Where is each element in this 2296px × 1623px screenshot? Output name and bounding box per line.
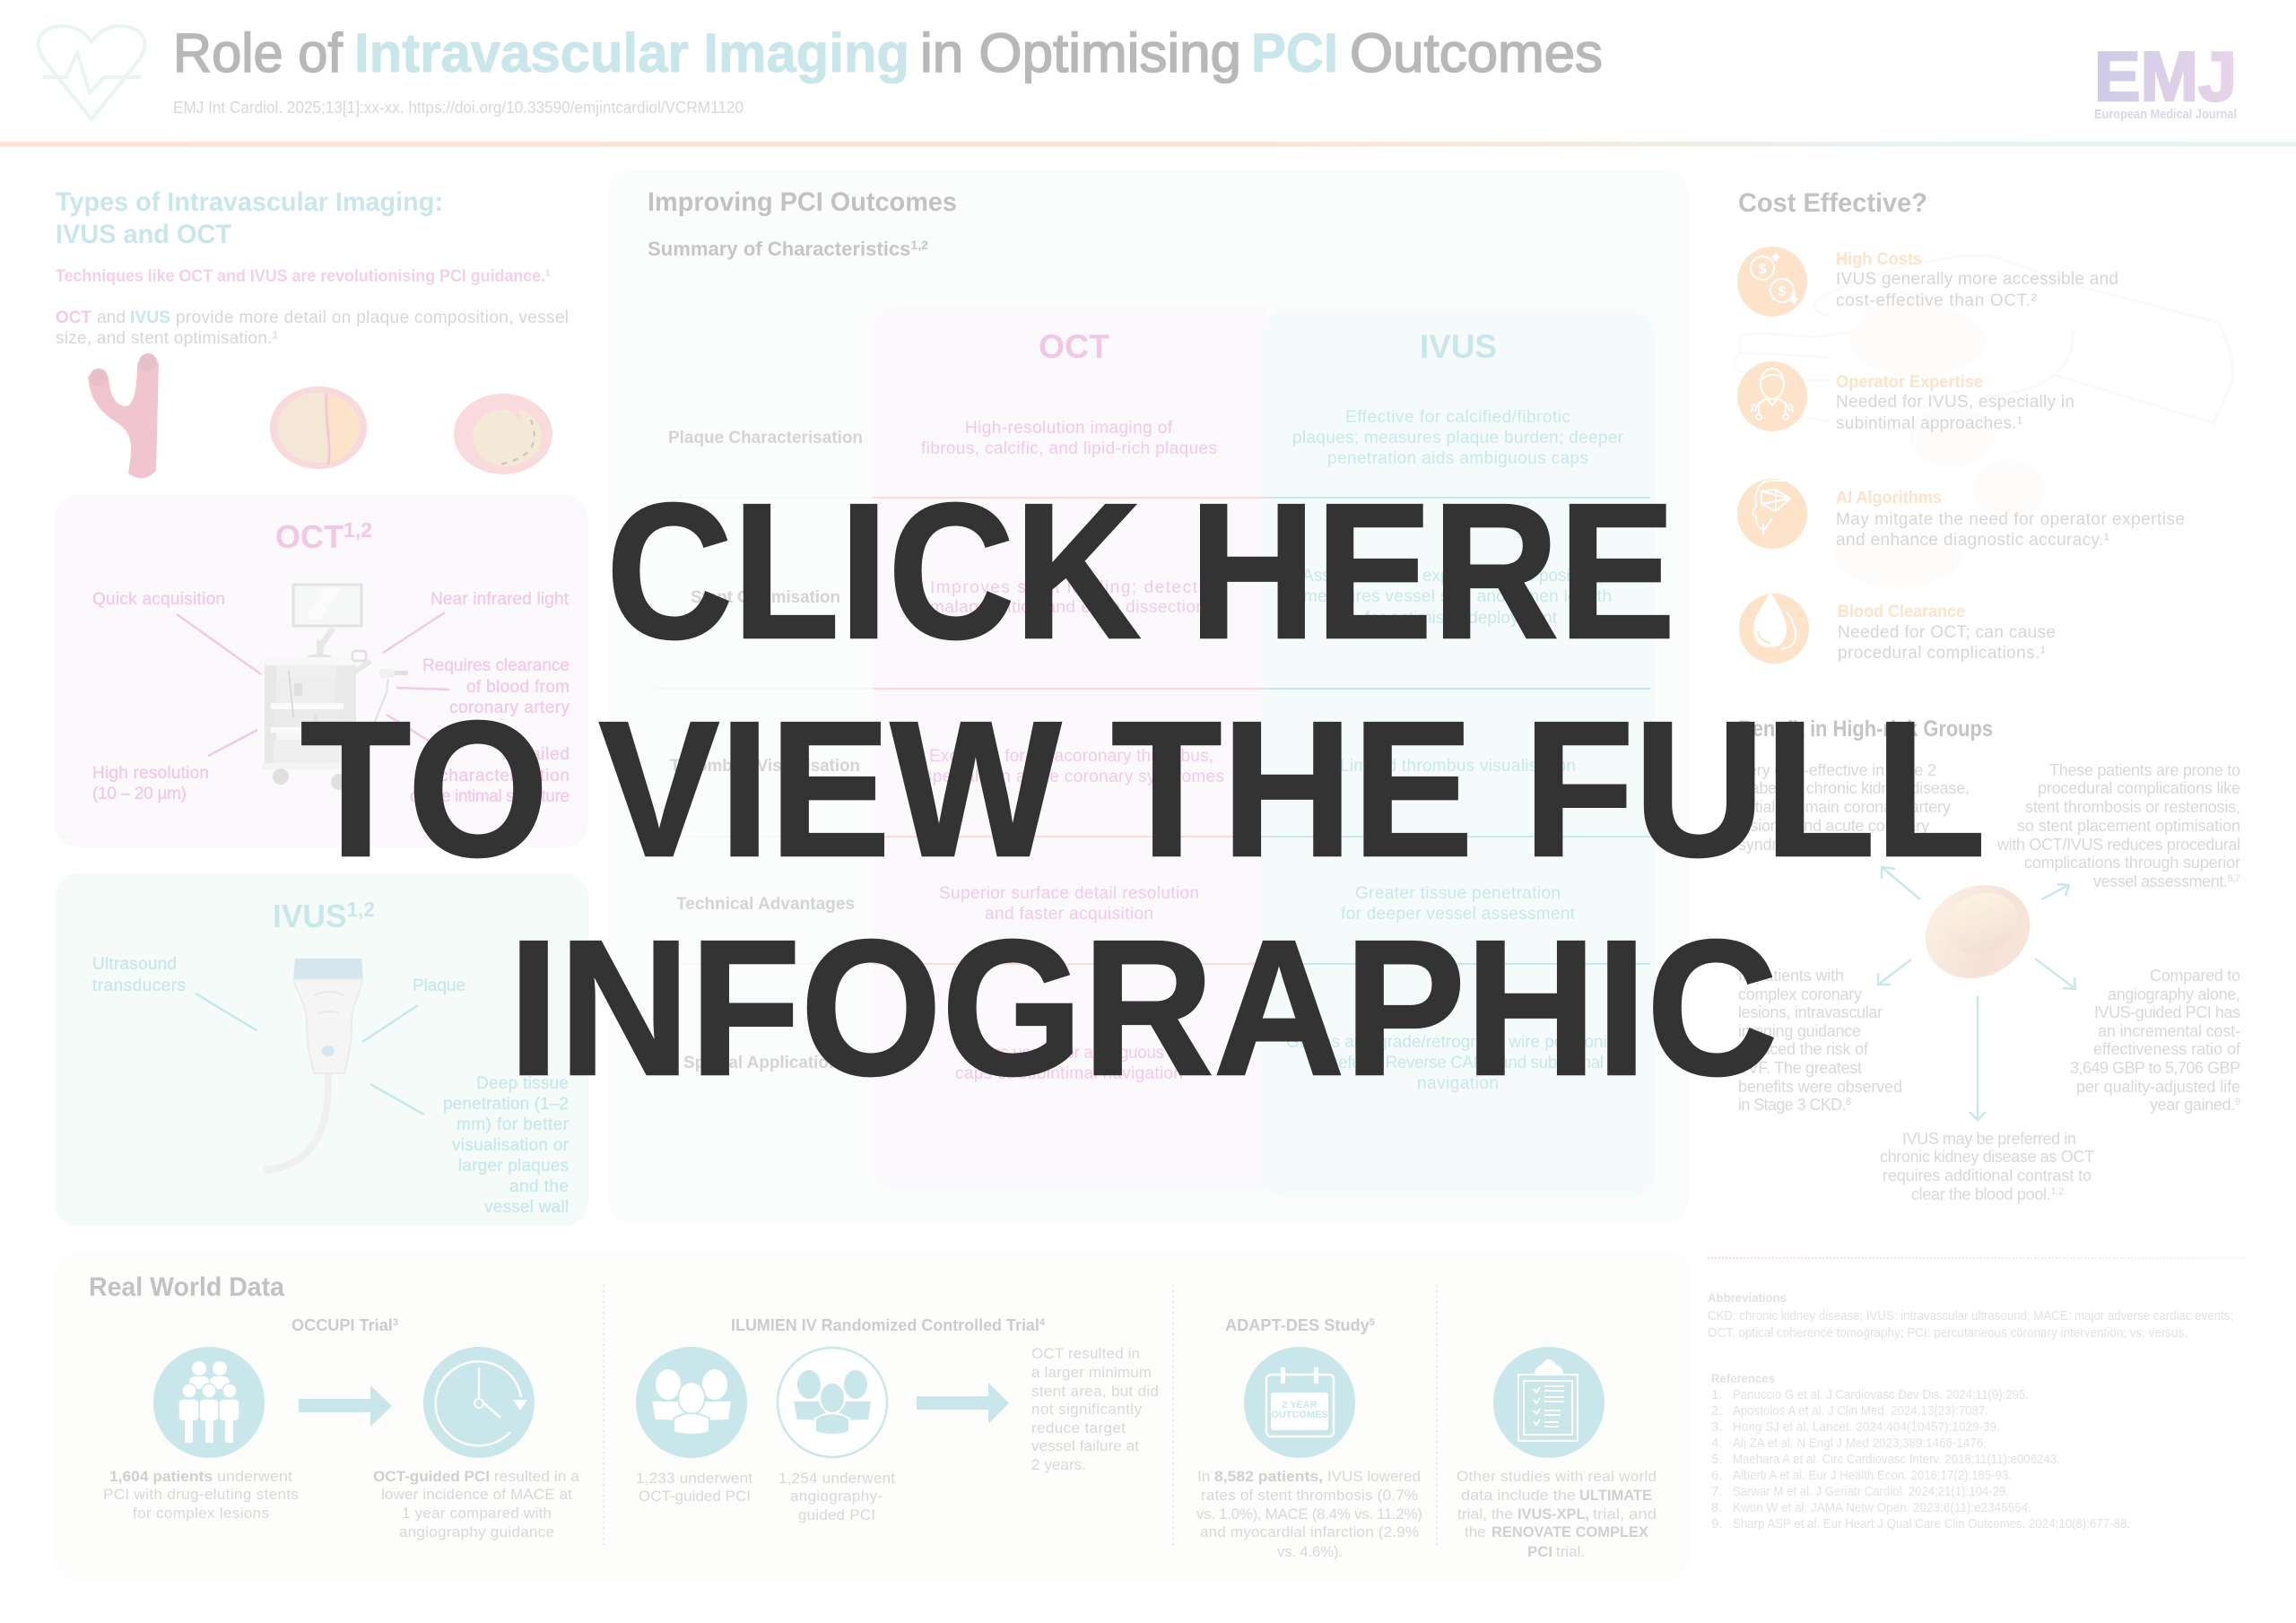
intro text: provide more detail on plaque composition, vessel [176,308,569,327]
citation: EMJ Int Cardiol. 2025;13[1]:xx-xx. https://doi.org/10.33590/emjintcardiol/VCRM1120 [173,99,744,117]
captions: other studies: PCI [1527,1543,1552,1560]
abbreviations [1708,1290,2233,1341]
references: 8. [1711,1500,1723,1515]
text: lower left: benefits were observed [1738,1078,1902,1096]
arrow [917,1383,1009,1424]
references [1711,1371,2130,1532]
captions: ADAPT-DES: rates of stent thrombosis (0.7% [1201,1487,1418,1504]
references: References [1711,1371,1775,1385]
captions: ILUMIEN IV [636,1345,1159,1523]
text: upper left: lesions, and acute coronary [1738,817,1929,835]
icon: patients crowd [153,1347,265,1458]
captions: other studies [1457,1468,1657,1560]
captions: other studies: RENOVATE COMPLEX [1492,1523,1649,1541]
subheading: summary: Summary of Characteristics [648,238,909,260]
OCT labels: High resolution [92,764,209,783]
text: upper right: procedural complications like [2038,779,2240,797]
title: Outcomes [1350,22,1603,83]
OCT labels: Requires clearance [422,656,570,675]
text: lower right: 3,649 GBP to 5,706 GBP [2070,1059,2240,1077]
icon: angiography group [778,1348,887,1457]
text: upper left [1738,761,1970,854]
OCT labels: (10 – 20 µm) [92,785,187,803]
text: lower left [1738,967,1902,1114]
references: Sharp ASP et al. Eur Heart J Qual Care Clin Outcomes. 2024;10(8):677-88. [1733,1516,2130,1532]
IVUS column text: measures vessel size and lumen length [1303,587,1612,606]
IVUS labels: visualisation or [452,1136,570,1155]
title: Intravascular Imaging [354,22,909,83]
illustration: faint hands behind cost section [1735,256,2233,587]
captions: OCCUPI: 1,604 patients [109,1468,213,1485]
row labels [668,429,863,1072]
heading: IVUS: IVUS [273,898,348,934]
text: lower right [2070,967,2241,1114]
IVUS column text: Effective for calcified/fibrotic [1345,408,1570,427]
icon: red blood cell [1909,868,2046,995]
captions: other studies: ULTIMATE [1579,1487,1652,1504]
heading: types: Types of Intravascular Imaging: [56,187,443,217]
captions: other studies: the [1465,1523,1486,1541]
captions: OCCUPI: angiography guidance [399,1523,554,1541]
captions: OCCUPI [103,1468,580,1541]
references: 3. [1711,1419,1723,1435]
title [173,22,1603,83]
trial headings: 4 [1039,1317,1046,1328]
IVUS column text: for deeper vessel assessment [1341,905,1576,924]
intro text: IVUS [130,308,170,327]
text: lower right: an incremental cost- [2098,1022,2240,1040]
logo: EMJ: EMJ [2094,37,2237,116]
text: upper right [1996,761,2240,890]
text: lower right: angiography alone, [2108,985,2240,1003]
illustration: OCT cart [262,585,408,790]
trial headings [291,1316,1375,1334]
OCT labels: Near infrared light [430,590,570,609]
icon: clock [423,1347,535,1458]
item: operator expertise [1737,361,2074,433]
row labels: Technical Advantages [676,895,855,914]
text: lower left: complex coronary [1738,985,1862,1003]
heading: types [56,187,443,249]
text: upper right: 6,7 [2228,873,2240,884]
captions: ADAPT-DES: vs. 4.6%). [1277,1543,1343,1560]
item: high costs [1737,247,2118,317]
abbreviations: Abbreviations [1708,1290,1787,1305]
captions: other studies: trial, and [1593,1506,1657,1523]
captions: OCCUPI: underwent [217,1468,292,1485]
captions: OCCUPI: PCI with drug-eluting stents [103,1486,299,1503]
captions: ILUMIEN IV: OCT resulted in [1031,1345,1140,1362]
captions: ILUMIEN IV: a larger minimum [1031,1364,1152,1381]
panel: improving PCI outcomes [608,170,1689,1223]
text: upper right: stent thrombosis or restenosis, [2025,798,2240,816]
intro text: OCT [56,308,91,327]
text: lower right: effectiveness ratio of [2093,1040,2241,1058]
text: lower left: in Stage 3 CKD. [1738,1096,1846,1114]
trial headings: OCCUPI Trial [291,1316,392,1334]
IVUS column text: Greater tissue penetration [1355,884,1561,903]
captions: other studies: trial, the [1457,1506,1513,1523]
dotted rule [1708,1257,2244,1259]
callout lines [196,994,424,1115]
captions: ILUMIEN IV: 1,254 underwent [778,1470,895,1487]
row labels: Plaque Characterisation [668,429,863,447]
IVUS labels: vessel wall [484,1198,569,1217]
icon: heart with ECG line [39,26,144,119]
text: upper left: ostial left main coronary artery [1738,798,1951,816]
text: bottom centre: IVUS may be preferred in [1902,1130,2076,1148]
IVUS column text: for optimised deployment [1365,609,1558,628]
icon: plaque cross-section 1 [270,386,367,469]
text: bottom centre: 1,2 [2050,1186,2064,1197]
OCT column text: Improves stent landing; detects [930,578,1207,597]
heading: benefit: Benefit in High-risk Groups [1738,716,1993,742]
item: operator expertise: subintimal approaches.¹ [1836,414,2022,433]
references: Apostolos A et al. J Clin Med. 2024;13(23):7087. [1733,1403,1988,1419]
OCT labels: Detailed [502,745,570,764]
icon: calendar: 2 YEAR [1282,1400,1318,1410]
trial headings: 3 [393,1317,398,1328]
trial headings: ADAPT-DES Study [1225,1316,1368,1334]
row dividers [655,498,1650,964]
captions: ILUMIEN IV: angiography- [790,1488,883,1505]
text: upper right: with OCT/IVUS reduces procedural [1996,836,2240,854]
arrow [299,1385,392,1427]
pink intro line: Techniques like OCT and IVUS are revolutionising PCI guidance.¹ [56,267,551,286]
title: Role of [173,22,344,83]
captions: ADAPT-DES: vs. 1.0%), MACE (8.4% vs. 11.2%) [1196,1506,1422,1523]
text: upper left: diabetes, chronic kidney disease, [1738,779,1970,797]
heading: types: IVUS and OCT [56,220,231,249]
text: bottom centre: clear the blood pool. [1911,1185,2051,1203]
captions: OCCUPI: resulted in a [494,1468,580,1485]
icon: calendar [1244,1347,1355,1458]
title: in Optimising [920,22,1241,83]
text: lower right: per quality-adjusted life [2076,1078,2240,1096]
OCT column text: Excellent for intracoronary thrombus, [929,747,1213,766]
overlay: click here call to action: INFOGRAPHIC [509,899,1778,1115]
captions: other studies: IVUS-XPL, [1518,1506,1589,1523]
IVUS column text: navigation [1417,1074,1499,1093]
OCT column text [914,419,1224,1083]
IVUS column text: penetration aids ambiguous caps [1327,449,1588,468]
OCT column text: fibrous, calcific, and lipid-rich plaques [921,439,1217,458]
item: high costs: $ [1759,262,1767,277]
text: lower left: 8 [1846,1097,1851,1107]
text: lower left: imaging guidance [1738,1022,1861,1040]
IVUS labels: Deep tissue [476,1074,569,1093]
icon: clipboard [1493,1347,1605,1458]
text: bottom centre: requires additional contrast to [1883,1167,2092,1185]
heading: cost effective: Cost Effective? [1738,188,1927,218]
panel: benefit in high-risk groups [1738,716,2241,1203]
icon: plaque cross-section 2 [454,394,552,474]
item: blood clearance: Needed for OCT; can cause [1838,623,2056,642]
item: AI algorithms: AI Algorithms [1836,489,1942,508]
item: AI algorithms: May mitgate the need for operator expertise [1836,510,2185,529]
heading: real world data: Real World Data [89,1272,284,1302]
captions: ADAPT-DES [1196,1468,1422,1560]
references: Maehara A et al. Circ Cardiovasc Interv. 2018;11(11):e006243. [1733,1452,2060,1467]
captions: OCCUPI: OCT-guided PCI [373,1468,490,1485]
panel: OCT device [55,495,588,847]
captions: OCCUPI: 1 year compared with [402,1505,552,1522]
references: 1. [1711,1387,1723,1402]
text: upper right: complications through superior [2024,854,2240,872]
IVUS labels: and the [509,1177,569,1196]
references: 9. [1711,1516,1723,1532]
references: Kwon W et al. JAMA Netw Open. 2023;6(11):e2345554. [1733,1500,2031,1515]
captions: ILUMIEN IV: guided PCI [798,1506,875,1523]
header rule [0,142,2296,147]
overlay: click here call to action: TO VIEW THE FULL [300,681,1986,897]
references: Alberti A et al. Eur J Health Econ. 2016;17(2):185-93. [1733,1468,2012,1483]
text: upper right: so stent placement optimisation [2017,817,2240,835]
references: Panuccio G et al. J Cardiovasc Dev Dis. 2024;11(9):295. [1733,1387,2029,1402]
captions: OCCUPI: for complex lesions [133,1505,269,1522]
references: 6. [1711,1468,1723,1483]
trial headings: 5 [1370,1317,1375,1328]
OCT column text: Superior surface detail resolution [939,884,1199,903]
row labels: Thrombus Visualisation [670,757,860,776]
text: lower right: Compared to [2150,967,2240,985]
heading: IVUS: 1,2 [347,898,375,921]
item: AI algorithms [1737,479,2185,550]
intro text: size, and stent optimisation.¹ [56,329,278,348]
heading: OCT: OCT [275,518,344,555]
OCT column text: especially in acute coronary syndromes [914,768,1224,786]
text: upper right: These patients are prone to [2049,761,2240,779]
text: lower right: year gained. [2150,1096,2235,1114]
IVUS labels: Plaque [413,976,465,995]
heading: OCT: 1,2 [344,518,372,542]
item: blood clearance: Blood Clearance [1838,603,1965,621]
item: blood clearance: procedural complications.¹ [1838,644,2046,663]
heading: improving PCI outcomes: Improving PCI Outcomes [648,187,957,217]
references: Sarwar M et al. J Geriatr Cardiol. 2024;21(1):104-29. [1733,1484,2009,1499]
panel: types of intravascular imaging [56,187,569,478]
trial headings: ILUMIEN IV Randomized Controlled Trial [731,1316,1040,1334]
column: OCT [873,307,1265,1189]
references: 5. [1711,1452,1723,1467]
item: blood clearance [1739,592,2056,664]
captions: ILUMIEN IV: not significantly [1031,1401,1143,1418]
text: upper right: vessel assessment. [2093,872,2228,890]
captions: other studies: data include the [1461,1487,1576,1504]
item: operator expertise: Needed for IVUS, especially in [1836,393,2074,412]
intro text [56,308,569,348]
text: lower left: lesions, intravascular [1738,1003,1883,1021]
subheading: summary: 1,2 [910,238,928,252]
references: 7. [1711,1484,1723,1499]
panel: IVUS device [55,873,588,1226]
OCT column text: caps or subintimal navigation [955,1064,1183,1083]
abbreviations: OCT: optical coherence tomography; PCI: percutaneous coronary intervention; vs: versus. [1708,1325,2187,1341]
OCT labels: Quick acquisition [92,590,225,609]
title: PCI [1251,22,1338,83]
OCT column text: High-resolution imaging of [965,419,1173,438]
column: OCT: OCT [1039,328,1109,365]
icon: OCT-guided group [636,1347,747,1458]
IVUS column text: Limited thrombus visualisation [1340,757,1576,776]
IVUS column text: useful in Reverse CART and subintimal [1321,1054,1604,1072]
text: upper left: Very cost-effective in Type 2 [1738,761,1936,779]
references: Ali ZA et al. N Engl J Med 2023;389:1466-1476. [1733,1436,1987,1451]
captions: ILUMIEN IV: 1,233 underwent [636,1470,752,1487]
item: high costs: High Costs [1836,250,1922,269]
captions: ILUMIEN IV: vessel failure at [1031,1437,1139,1454]
text: lower left: TVF. The greatest [1738,1059,1862,1077]
item: high costs: IVUS generally more accessible and [1836,270,2118,289]
IVUS labels: mm) for better [457,1115,570,1134]
item: AI algorithms: and enhance diagnostic accuracy.¹ [1836,531,2109,550]
IVUS labels: Ultrasound [92,955,177,974]
text: upper left: syndromes. [1738,836,1821,854]
captions: ADAPT-DES: IVUS lowered [1327,1468,1421,1485]
text: lower right: 9 [2235,1097,2240,1107]
text: bottom centre: chronic kidney disease as OCT [1880,1148,2094,1166]
captions: OCCUPI: lower incidence of MACE at [381,1486,572,1503]
captions: ILUMIEN IV: reduce target [1031,1419,1126,1436]
column: IVUS [1262,311,1655,1197]
arrows [1878,867,2075,1120]
text: bottom centre [1880,1130,2094,1203]
IVUS column text: Guides antegrade/retrograde wire positioning; [1286,1033,1631,1052]
captions: other studies: trial. [1556,1543,1585,1560]
OCT labels: characterisation [439,767,570,785]
captions: ILUMIEN IV: stent area, but did [1031,1383,1159,1400]
captions: other studies: Other studies with real world [1457,1468,1657,1485]
text: lower left: reduced the risk of [1738,1040,1869,1058]
references: 2. [1711,1403,1723,1419]
overlay: click here call to action: CLICK HERE [606,463,1675,679]
OCT labels: of blood from [466,678,570,697]
icon: calendar: OUTCOMES [1271,1410,1328,1420]
IVUS labels: larger plaques [458,1157,569,1176]
OCT column text: Less useful for ambiguous [974,1044,1164,1063]
panel: cost effective [1737,188,2185,664]
OCT labels: of the intimal structure [410,787,570,806]
illustration: IVUS probe [265,959,363,1170]
IVUS labels: penetration (1–2 [443,1095,569,1114]
references: 4. [1711,1436,1723,1451]
IVUS column text: plaques; measures plaque burden; deeper [1292,429,1624,447]
OCT column text: and faster acquisition [985,905,1153,924]
captions: ADAPT-DES: In [1197,1468,1210,1485]
abbreviations: CKD: chronic kidney disease; IVUS: intravascular ultrasound; MACE: major adverse cardiac events; [1708,1308,2233,1324]
IVUS labels: transducers [92,976,186,995]
callout lines [177,612,449,756]
text: lower left: In patients with [1738,967,1844,985]
row labels: Stent Optimisation [691,588,840,607]
IVUS column text: Assesses stent expansion and position; [1302,567,1603,586]
IVUS column text [1286,408,1631,1093]
dotted dividers [604,1285,1437,1545]
item: operator expertise: Operator Expertise [1836,373,1983,392]
captions: ILUMIEN IV: 2 years. [1031,1456,1086,1473]
OCT column text: malapposition and edge dissection [930,598,1205,617]
IVUS labels [92,955,570,1217]
item: high costs: $ [1779,284,1787,299]
captions: ILUMIEN IV: OCT-guided PCI [639,1488,751,1505]
item: high costs: cost-effective than OCT.² [1836,291,2037,310]
captions: ADAPT-DES: 8,582 patients, [1214,1468,1323,1485]
overlay: click here call to action [300,463,1986,1115]
references: Hong SJ et al. Lancet. 2024;404(10457):1029-39. [1733,1419,2000,1435]
intro text: and [97,308,126,327]
text: lower right: IVUS-guided PCI has [2094,1003,2240,1021]
icon: artery [88,353,159,478]
logo: EMJ: European Medical Journal [2094,107,2237,122]
OCT labels [92,590,570,806]
column: IVUS: IVUS [1420,328,1497,365]
captions: ADAPT-DES: and myocardial infarction (2.9% [1200,1523,1419,1541]
panel: real world data [56,1251,1690,1581]
row labels: Special Applications [683,1054,848,1072]
OCT labels: coronary artery [449,699,570,717]
